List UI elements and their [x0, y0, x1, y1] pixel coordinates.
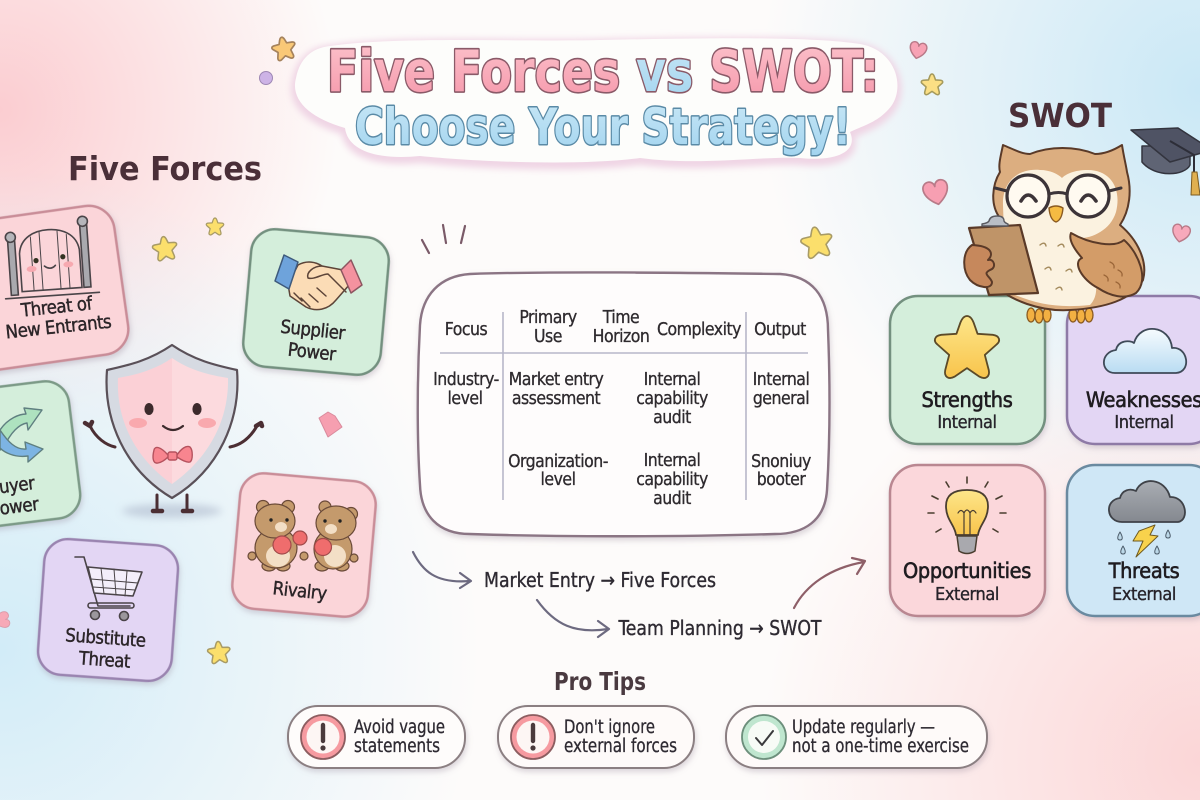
owl body — [992, 145, 1144, 310]
panel: threats — [1067, 465, 1200, 616]
icon: handshake — [275, 255, 362, 310]
table row 1: assessment — [512, 389, 600, 409]
label: substitute threat: Threat — [77, 648, 132, 673]
panel: threat of new entrants — [0, 202, 132, 374]
table row 1: Industry- — [433, 370, 499, 390]
table row 1: general — [753, 389, 809, 409]
owl feet — [1027, 308, 1093, 323]
table row 2: Internal — [644, 451, 700, 471]
title line 1: Five Forces vs SWOT: — [327, 39, 879, 105]
comparison table — [418, 272, 829, 536]
table row 1: audit — [653, 408, 691, 428]
label: weaknesses: Internal — [1114, 412, 1174, 433]
tip: don't ignore external forces — [498, 706, 694, 768]
label: threat of new entrants: New Entrants — [5, 312, 112, 344]
label: opportunities: External — [935, 584, 999, 605]
panel: supplier power — [241, 227, 391, 377]
tip text — [564, 717, 677, 757]
icon: star — [935, 316, 999, 378]
tip text: Avoid vague — [354, 717, 445, 738]
label: substitute threat — [65, 625, 146, 673]
shield face — [129, 403, 216, 463]
owl left hand — [964, 245, 994, 287]
icon: gate — [0, 215, 99, 299]
arrow: to swot — [794, 558, 865, 608]
label: rivalry: Rivalry — [272, 578, 328, 605]
table header: Output — [754, 320, 806, 340]
label: substitute threat: Substitute — [65, 625, 146, 652]
decorative stars and hearts — [0, 35, 1191, 664]
table row 1: Internal — [753, 370, 809, 390]
table grid lines — [440, 312, 808, 500]
panel: substitute threat — [36, 537, 180, 683]
panel: strengths — [890, 296, 1045, 444]
label: weaknesses — [1086, 388, 1200, 433]
table row 2: Organization- — [508, 452, 608, 472]
table header — [445, 308, 806, 347]
icon: cloud — [1104, 329, 1186, 373]
table row 1: capability — [636, 389, 708, 409]
label: supplier power: Power — [287, 340, 337, 366]
tip text — [354, 717, 445, 757]
table row 1: level — [448, 389, 482, 409]
table header: Primary — [519, 308, 577, 328]
owl glasses and eyes — [995, 175, 1121, 217]
tip text: Update regularly — — [792, 717, 935, 738]
heading: SWOT: SWOT — [1008, 96, 1113, 135]
label: opportunities — [903, 559, 1031, 605]
text: team planning rule: Team Planning → SWOT — [618, 616, 822, 640]
heading: Five Forces: Five Forces — [68, 149, 262, 188]
owl wing — [1070, 233, 1142, 297]
label: strengths: Internal — [937, 412, 997, 433]
table row 1: Market entry — [509, 370, 604, 390]
table header: Complexity — [657, 320, 741, 340]
panel: rivalry — [230, 471, 378, 619]
label: buyer power — [0, 473, 40, 521]
icon: warning — [301, 715, 345, 759]
shield arms and legs — [85, 422, 262, 511]
title line 2: Choose Your Strategy! — [355, 98, 851, 156]
table row 2: Snoniuy — [751, 452, 811, 472]
heading: pro tips: Pro Tips — [554, 667, 646, 696]
icon: light bulb — [928, 477, 1006, 554]
label: threat of new entrants: Threat of — [19, 293, 94, 322]
label: strengths — [921, 388, 1013, 433]
tip text: statements — [354, 736, 440, 757]
icon: warning — [511, 715, 555, 759]
icon: storm cloud — [1109, 481, 1185, 557]
label: threats: Threats — [1108, 559, 1180, 584]
table row 2 — [508, 451, 811, 509]
table row 2: capability — [636, 470, 708, 490]
table row 2: level — [541, 470, 575, 490]
icon: shopping cart — [75, 557, 142, 620]
label: threats — [1108, 559, 1180, 605]
label: supplier power: Supplier — [279, 317, 346, 344]
table row 1 — [433, 370, 809, 428]
tip text: Don't ignore — [564, 717, 655, 738]
tip: avoid vague statements — [288, 706, 465, 768]
arrow: market entry — [413, 552, 471, 588]
arrow: team planning — [537, 600, 609, 637]
table row 2: booter — [757, 470, 806, 490]
mascot: shield character — [85, 345, 262, 518]
mascot: owl with clipboard — [964, 145, 1144, 323]
table header: Horizon — [593, 327, 649, 347]
label: strengths: Strengths — [921, 388, 1013, 413]
tip text: not a one-time exercise — [792, 736, 969, 757]
label: supplier power — [279, 317, 346, 366]
table header: Time — [602, 308, 639, 328]
panel: buyer power — [0, 379, 83, 531]
table header: Focus — [445, 320, 487, 340]
label: opportunities: Opportunities — [903, 559, 1031, 584]
tip text: external forces — [564, 736, 677, 757]
text: market entry rule: Market Entry → Five Forces — [484, 568, 716, 592]
label: weaknesses: Weaknesses — [1086, 388, 1200, 413]
clipboard — [969, 216, 1038, 295]
panel: weaknesses — [1067, 296, 1200, 444]
table header: Use — [534, 327, 562, 347]
label: threats: External — [1112, 584, 1176, 605]
table row 1: Internal — [644, 370, 700, 390]
table row 2: audit — [653, 489, 691, 509]
panel: opportunities — [890, 465, 1045, 616]
icon: graduation cap — [1131, 128, 1200, 195]
label: threat of new entrants — [5, 293, 112, 344]
icon: boxing bears — [248, 500, 358, 571]
icon: check — [742, 715, 786, 759]
icon: swapping arrows — [0, 408, 43, 462]
title banner — [295, 38, 897, 165]
tip: update regularly — [726, 706, 987, 768]
tip text — [792, 717, 969, 757]
